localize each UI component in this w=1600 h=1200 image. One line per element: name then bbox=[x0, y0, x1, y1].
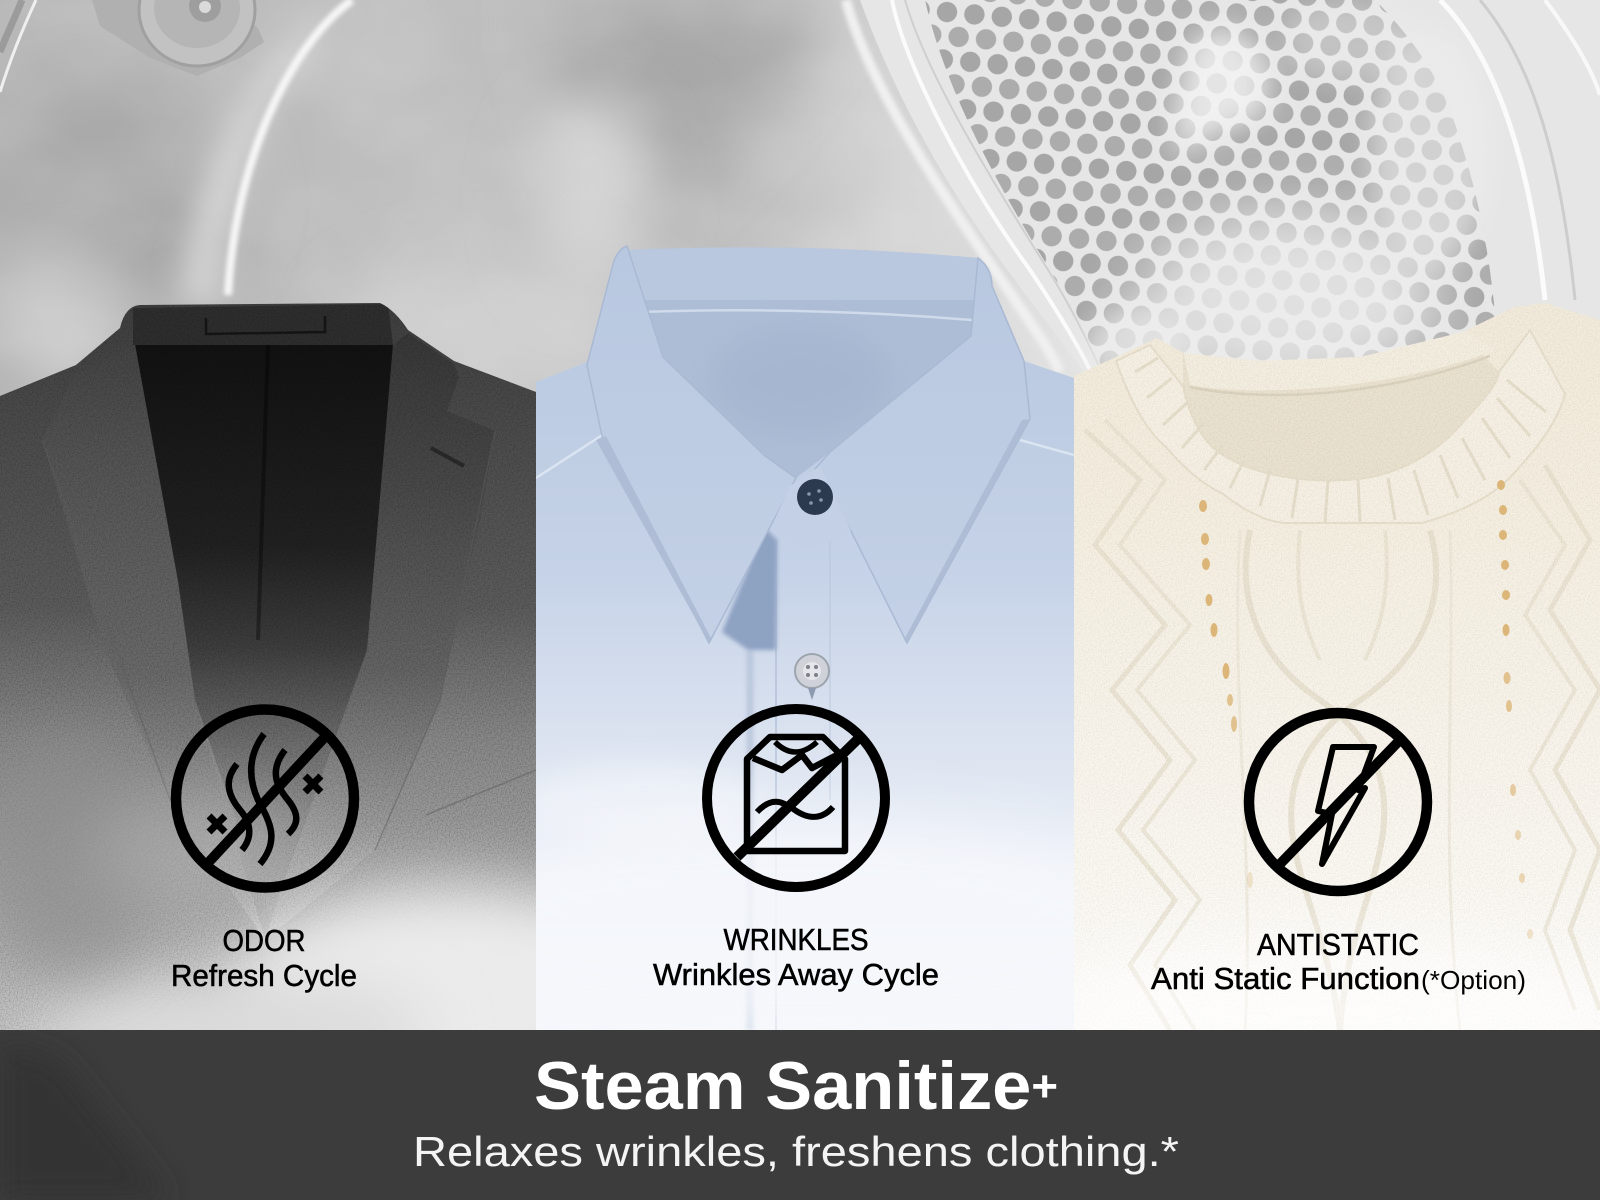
neck band bbox=[133, 304, 393, 345]
white drum rim arc bbox=[228, 0, 352, 295]
inner neck stitch bbox=[1190, 356, 1490, 395]
heading: + bbox=[1031, 1062, 1058, 1111]
yoke stitch lines bbox=[536, 430, 1074, 478]
rib lines bbox=[1135, 358, 1546, 522]
collar stand bbox=[770, 466, 851, 546]
right collar wing bbox=[815, 258, 1030, 643]
label: odor: Refresh Cycle bbox=[171, 958, 357, 993]
knit texture bbox=[1074, 300, 1600, 1035]
placket folds bbox=[746, 650, 754, 1030]
top button bbox=[797, 479, 833, 515]
lapel button hole bbox=[431, 448, 464, 466]
lining centre seam bbox=[258, 345, 268, 640]
dark gap beneath collar bbox=[722, 528, 777, 650]
label: antistatic: Anti Static Function bbox=[1151, 961, 1420, 996]
label: antistatic bbox=[1151, 927, 1526, 996]
panel: jacket (odor) bbox=[0, 303, 536, 1030]
neck rib bbox=[1116, 330, 1565, 523]
icon: no wrinkles bbox=[707, 709, 885, 887]
panel: knit sweater (antistatic) bbox=[1074, 303, 1600, 1030]
background: steam-filled dryer drum bbox=[0, 0, 1600, 396]
drum dark fold bbox=[540, 0, 830, 220]
heading: Steam Sanitize bbox=[534, 1048, 1014, 1124]
left lapel bbox=[116, 673, 264, 938]
shirt collar bbox=[587, 246, 1030, 643]
faint jacket shadow in band bbox=[0, 1040, 170, 1200]
label: wrinkles bbox=[653, 922, 939, 992]
fog over lower shirt bbox=[536, 794, 1074, 1030]
hanger loop bbox=[206, 316, 325, 334]
jacket seam lines bbox=[42, 431, 536, 850]
eyelet columns bbox=[1199, 480, 1533, 939]
bottom caption band bbox=[0, 1030, 1600, 1200]
blotch on back neck bbox=[710, 325, 890, 435]
subheading: Relaxes wrinkles, freshens clothing.* bbox=[413, 1128, 1179, 1175]
top-left chrome rim bbox=[0, 0, 36, 92]
jacket weave bbox=[0, 300, 536, 860]
light steam patch centre bbox=[340, 260, 660, 400]
panel: shirt (wrinkles) bbox=[536, 362, 1074, 1030]
label: wrinkles: WRINKLES bbox=[724, 922, 868, 957]
second button bbox=[795, 654, 829, 700]
inside back neck bbox=[627, 247, 978, 478]
drum inner plate bbox=[860, 0, 1600, 400]
right lapel bbox=[265, 333, 495, 940]
label: odor: ODOR bbox=[222, 923, 306, 958]
drum curved ribs bbox=[892, 0, 1091, 372]
left collar wing bbox=[587, 246, 796, 643]
back neck rib bbox=[1183, 330, 1495, 390]
collar stitch bbox=[640, 310, 972, 320]
icon: no odor bbox=[176, 710, 354, 888]
shirt body bbox=[536, 360, 1074, 1035]
collar band top bbox=[627, 247, 992, 300]
left lip of drum bbox=[180, 0, 345, 305]
sweater body bbox=[1074, 300, 1600, 1035]
fog over lower sweater bbox=[1030, 940, 1600, 1080]
jacket body bbox=[0, 290, 536, 1035]
perforated drum holes bbox=[925, 0, 1494, 364]
cable zigzags bbox=[1085, 420, 1600, 1030]
steam fog lower jacket bbox=[209, 845, 536, 1030]
collar shadow bbox=[596, 436, 712, 643]
jacket lining bbox=[135, 344, 393, 920]
label: antistatic: ANTISTATIC bbox=[1257, 927, 1419, 962]
label: odor bbox=[171, 923, 357, 993]
label: antistatic: (*Option) bbox=[1421, 965, 1526, 995]
soft steam texture bbox=[0, 0, 1600, 460]
label: wrinkles: Wrinkles Away Cycle bbox=[653, 957, 939, 992]
bolt fitting at drum top bbox=[92, 0, 264, 76]
steam over holes bbox=[1174, 28, 1270, 153]
icon: no static bbox=[1249, 713, 1427, 891]
left drum shade bbox=[0, 90, 240, 310]
neck inner back bbox=[1183, 345, 1499, 480]
